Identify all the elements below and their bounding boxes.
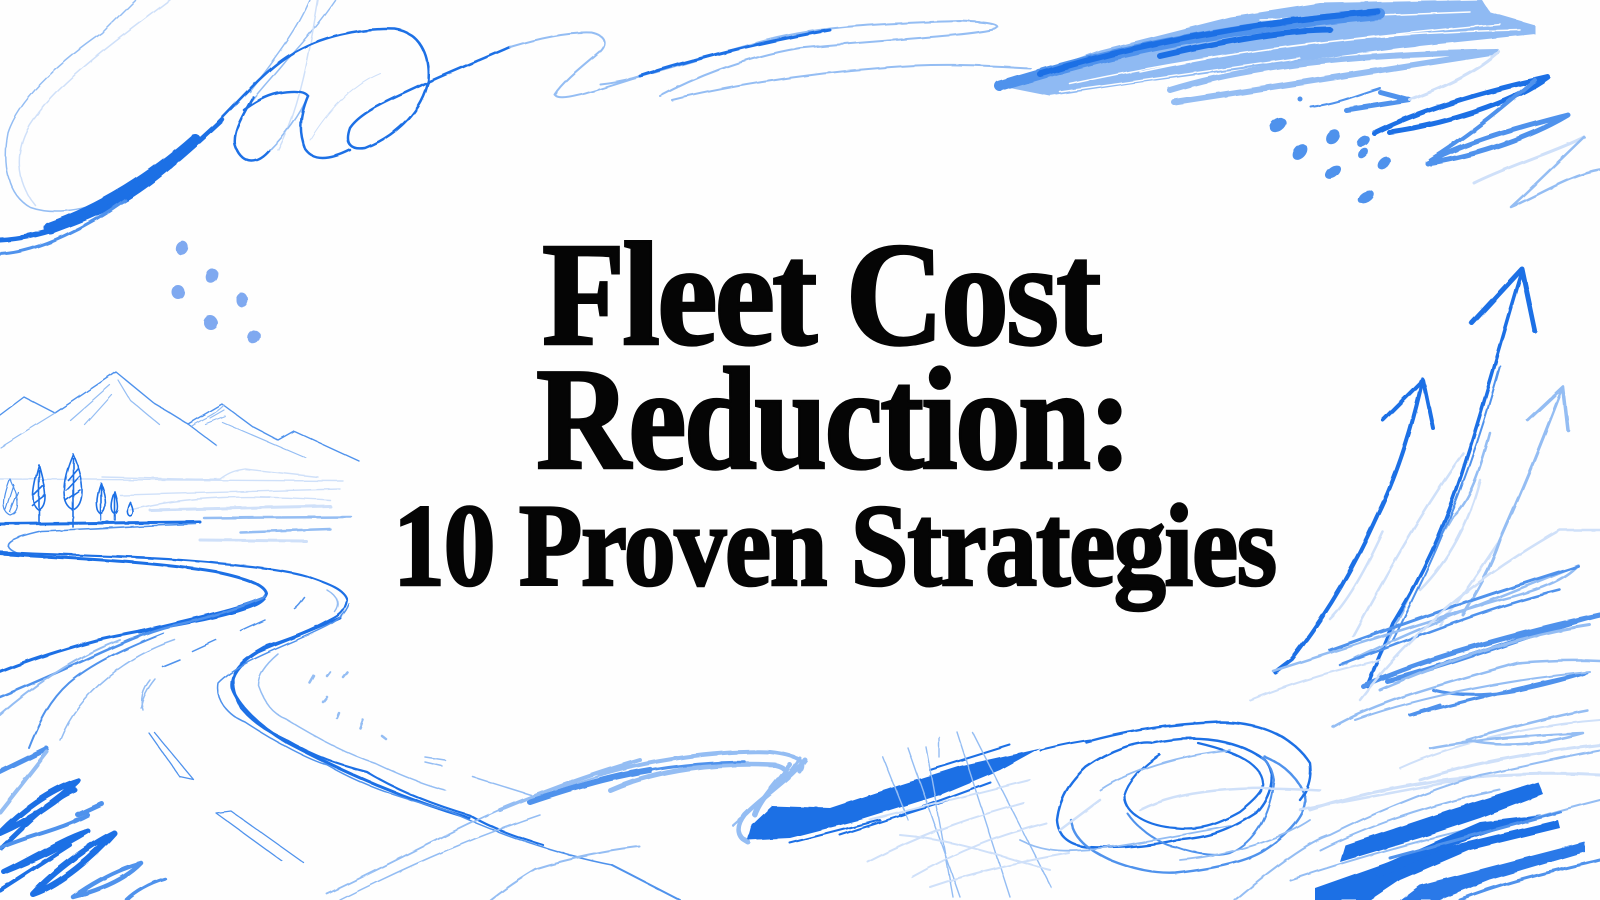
scribble: top-right brush strokes: [1000, 0, 1600, 207]
title: [393, 212, 1276, 612]
arrows: rising sketched arrows: [1275, 269, 1568, 686]
subtitle line: 10 Proven Strategies: 10 Proven Strategies: [393, 481, 1276, 612]
scribble: bottom-right solid strokes: [1315, 782, 1600, 900]
scribble: right zigzag strokes: [1235, 530, 1600, 900]
illustration: mountains: [0, 372, 359, 510]
illustration: trees and horizon: [0, 454, 351, 541]
flourish: top-left loops: [0, 0, 640, 254]
flourish: top centre strokes: [600, 21, 1030, 100]
title line: Reduction: Reduction:: [536, 339, 1129, 501]
sketch: bottom grid: [868, 732, 1069, 897]
title line: Fleet Cost: Fleet Cost: [542, 212, 1101, 376]
scribble: bottom-left: [0, 749, 165, 900]
dots: top-right cluster: [1267, 96, 1393, 206]
dots: left cluster: [172, 239, 263, 346]
brush stroke: bottom S-curve: [327, 740, 1090, 900]
illustration: winding road: [0, 524, 680, 900]
sketch: scribbled rings: [1020, 722, 1460, 873]
